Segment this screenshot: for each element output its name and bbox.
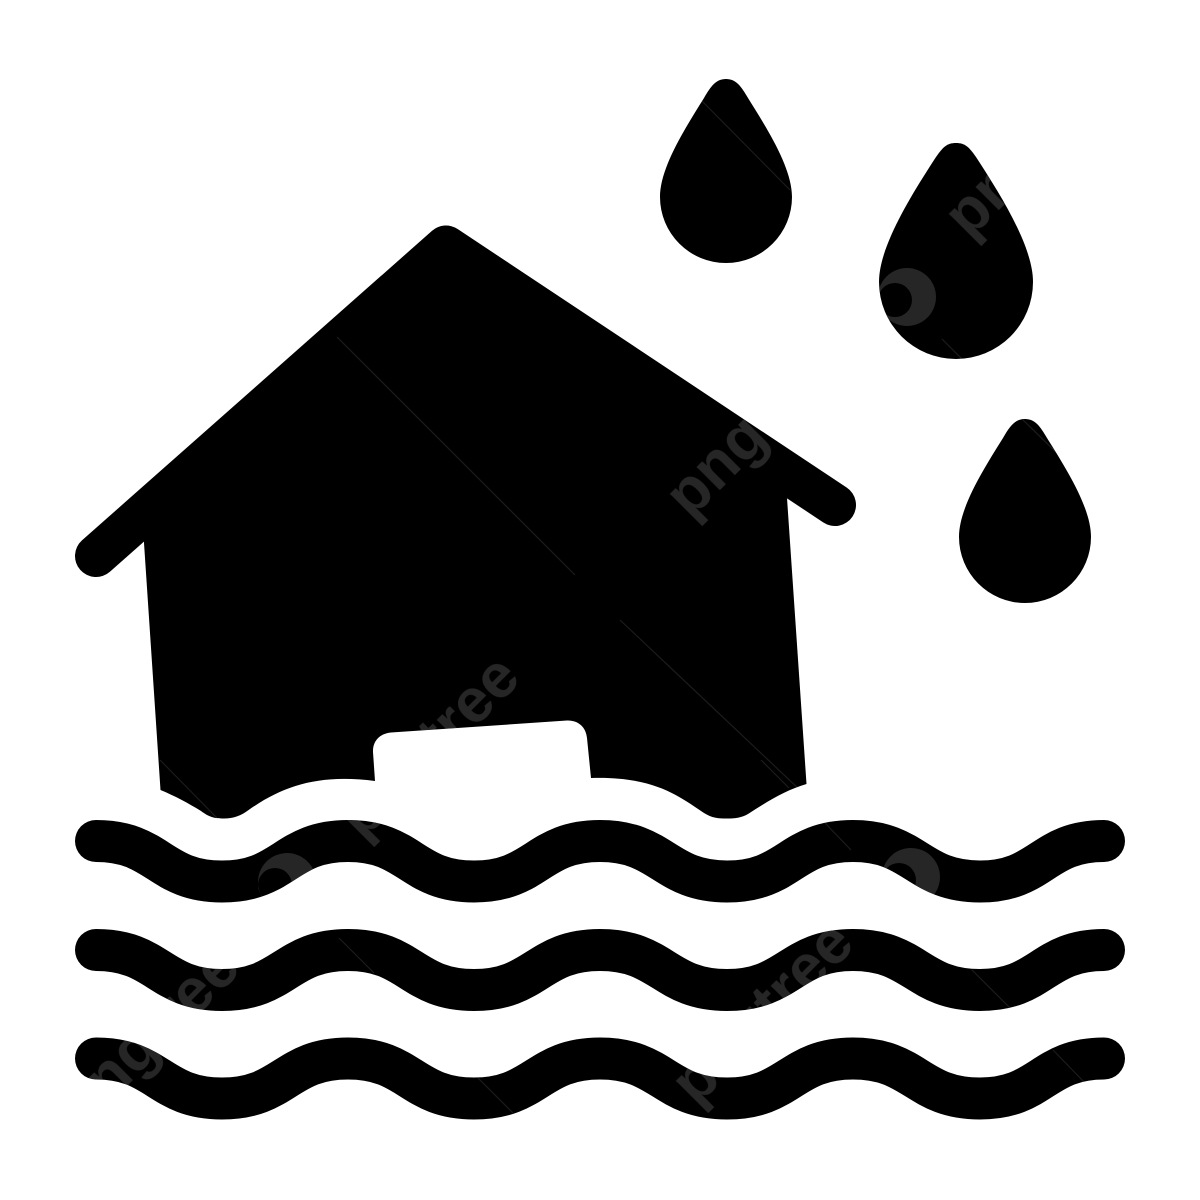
icon: water waves bbox=[96, 841, 1104, 1098]
watermark: faint pngtree marks: pngtree bbox=[323, 641, 533, 851]
wave top bbox=[96, 841, 1104, 882]
icon: rain drop top bbox=[660, 79, 792, 263]
watermark: faint pngtree marks: pngtree bbox=[930, 40, 1140, 250]
icon: rain drop middle bbox=[879, 143, 1033, 359]
wave bottom bbox=[96, 1058, 1104, 1098]
watermark: faint pngtree marks: pngtree bbox=[651, 320, 861, 530]
icon: house bbox=[96, 246, 835, 818]
wave middle bbox=[96, 950, 1104, 990]
watermark: faint pngtree marks: pngtree bbox=[43, 931, 253, 1141]
icon: rain drop bottom bbox=[959, 419, 1091, 603]
roof bbox=[96, 246, 835, 556]
house body bbox=[144, 260, 806, 818]
watermark: faint pngtree marks: pngtree bbox=[657, 907, 867, 1117]
